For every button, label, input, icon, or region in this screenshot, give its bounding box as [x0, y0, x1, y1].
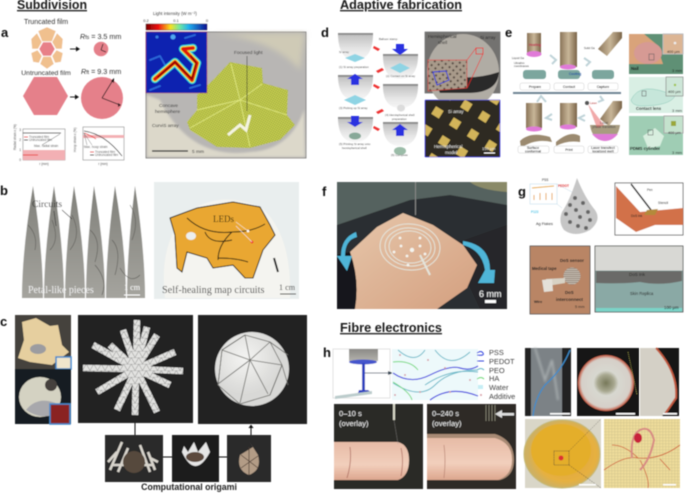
label: 3 mm: 3 mm	[672, 108, 683, 113]
panel letter f: f	[322, 184, 327, 199]
label: Computational origami: Computational origami	[141, 482, 237, 492]
chart: radial strain: Max. radial strain	[34, 144, 58, 148]
label: Self-healing map circuits: Self-healing map circuits	[162, 285, 264, 296]
schematic: hemisphere stamp steps: Si array	[339, 50, 350, 54]
label: 400 μm: 400 μm	[667, 50, 680, 54]
schematic: ink droplet with Ag flakes: P123	[531, 210, 539, 214]
schematic: ink droplet with Ag flakes: PEDOT	[558, 184, 569, 188]
divider	[513, 92, 621, 94]
label: Contact lens: Contact lens	[636, 106, 662, 111]
panel letter g: g	[518, 184, 526, 199]
schematic: hemisphere stamp steps: (6) Complete	[391, 153, 408, 157]
render: pen on arm with stencil: Stencil	[658, 201, 668, 205]
schematic: ink droplet with Ag flakes: Ag Flakes	[536, 222, 553, 226]
label: Focused light: Focused light	[234, 50, 263, 56]
SEM: DoS ink on skin replica: Skin Replica	[630, 291, 654, 296]
chart: radial strain: r (mm)	[39, 162, 49, 166]
schematic: printing process: Laser transfect	[591, 146, 616, 150]
chart: radial strain: Truncated film	[29, 135, 49, 139]
colour bar: light intensity: 0.1	[173, 18, 180, 23]
heatmap inset	[146, 32, 207, 93]
SEM: DoS ink on skin replica: 100 μm	[664, 305, 679, 310]
photo: fold stage 2	[172, 435, 219, 482]
schematic: printing process: Surface	[527, 146, 539, 150]
schematic: hemisphere stamp steps: (3) Picking up Si array	[339, 106, 368, 110]
chart: hoop strain: Untruncated film	[95, 153, 119, 157]
icon: large circle with radius arrows	[81, 77, 123, 119]
photo: dandelion zoom	[640, 348, 679, 416]
scale bar	[484, 152, 495, 154]
label: Si array: Si array	[480, 35, 496, 40]
photo: dandelion	[577, 348, 639, 416]
photo: DoS sensor on skin: Medical tape	[532, 266, 557, 271]
arrow: right curved blue	[463, 241, 495, 283]
photo: wrapped sphere	[15, 369, 71, 424]
chart: hoop strain	[73, 127, 124, 166]
photo: fold stage 3	[227, 435, 271, 482]
panel g: drop-on-skin sensor	[518, 178, 683, 314]
label: Rfs = 3.5 mm: Rfs = 3.5 mm	[80, 32, 121, 41]
label: model: model	[445, 150, 457, 155]
schematic: printing process: Laser	[590, 101, 597, 105]
scale bar 1 cm	[124, 294, 140, 296]
legend: fibre ink components: PEO	[489, 366, 505, 375]
chart: hoop strain: Truncated film	[95, 150, 115, 154]
panel d: adaptive fabrication steps	[321, 25, 500, 157]
chart: radial strain: 0	[19, 158, 21, 162]
schematic: ink droplet with Ag flakes: PSS	[542, 178, 548, 182]
label: Rft = 9.3 mm: Rft = 9.3 mm	[81, 67, 121, 76]
icon: LED markers	[236, 222, 253, 243]
schematic: hemisphere stamp steps: (4) Hemispherical shell	[385, 113, 415, 117]
label: Truncated film: Truncated film	[24, 19, 68, 26]
schematic: printing process: membranes	[514, 64, 529, 68]
scale bar 1 cm	[280, 293, 296, 295]
chart: hoop strain: Hoop strain ε (%)	[73, 128, 77, 152]
scale label: 1 cm	[279, 283, 296, 292]
label: (overlay): (overlay)	[339, 419, 369, 428]
legend: fibre ink components	[477, 348, 515, 401]
colour bar: light intensity: Light intensity (W m⁻²)	[153, 11, 197, 16]
icon: small circle with radius arrows	[94, 42, 108, 56]
colour bar: light intensity	[143, 11, 209, 30]
heading: Fibre electronics: Fibre electronics	[340, 320, 442, 335]
schematic: printing process: Solid Ga	[584, 46, 595, 50]
schematic: printing process: Liquid Ga	[512, 56, 524, 60]
photo: DoS sensor on skin	[530, 246, 590, 314]
panel letter e: e	[505, 25, 512, 40]
photo: petal-like pieces	[22, 186, 145, 298]
panel letter a: a	[1, 25, 9, 40]
icon: truncated film petals	[31, 27, 63, 69]
photo: DoS sensor on skin: DoS	[565, 290, 574, 295]
schematic: printing process: Contact	[563, 85, 576, 89]
colour bar: light intensity: 0.2	[143, 18, 150, 23]
schematic: printing process: Capture	[597, 85, 609, 89]
scale label: 6 mm: 6 mm	[479, 289, 502, 299]
schematic: printing process: Cooling	[569, 72, 581, 76]
diagram: polymer network	[392, 349, 478, 400]
SEM: DoS ink on skin replica: DoS Ink	[629, 272, 646, 277]
panel letter d: d	[321, 25, 329, 40]
legend: fibre ink components: PEDOT	[489, 357, 515, 366]
scale bar	[485, 300, 496, 303]
photo: hemispherical shell with Si array	[425, 32, 500, 110]
schematic: hemisphere stamp steps: (2) Contact on Si array	[386, 74, 416, 78]
photo: DoS sensor on skin: 5 mm	[575, 305, 584, 309]
label: Circuits: Circuits	[32, 200, 62, 210]
label: shell: shell	[438, 40, 447, 45]
schematic: printing process: Print	[565, 148, 574, 152]
photo: crumpled paper around sphere	[15, 315, 71, 369]
panel letter h: h	[323, 345, 331, 360]
colour bar: light intensity: 0	[206, 18, 209, 23]
panel a: subdivision schematic and focused light photo	[1, 11, 306, 166]
arrow: left curved blue	[337, 232, 357, 271]
photo: nail	[629, 34, 683, 74]
label: Hemispherical shell: Hemispherical	[428, 34, 457, 39]
photo: microscope view of Si array	[425, 100, 500, 157]
schematic: printing process: Heating	[529, 43, 541, 47]
legend: fibre ink components: Additive	[489, 392, 515, 401]
schematic: ink droplet with Ag flakes	[530, 178, 598, 234]
schematic: nozzle drawing fibre	[333, 349, 393, 399]
scale label: 5 mm	[192, 149, 204, 155]
label: PDMS cylinder: PDMS cylinder	[630, 146, 660, 151]
arrow: focused light	[246, 56, 248, 111]
label: LEDs: LEDs	[213, 214, 234, 224]
label: 3 mm: 3 mm	[672, 68, 683, 73]
schematic: printing process: phase transition	[592, 125, 616, 129]
photo: petri dish	[524, 419, 601, 488]
arrows: circuits	[54, 210, 72, 226]
label: scale 150 μm: 150 μm	[482, 146, 496, 151]
legend: fibre ink components: PSS	[489, 348, 504, 357]
schematic: printing process: Ultrathin	[514, 61, 525, 65]
photo: magnified vessels	[604, 419, 680, 488]
schematic: hemisphere stamp steps: Balloon stamp	[379, 37, 398, 41]
SEM: DoS ink on skin replica	[595, 246, 683, 312]
chart: hoop strain: r (mm)	[98, 162, 108, 166]
photo: DoS sensor on skin: interconnect	[556, 297, 584, 302]
label: Nail: Nail	[631, 66, 639, 71]
label: 3 mm: 3 mm	[672, 150, 683, 155]
label: Concave: Concave	[159, 103, 178, 109]
panel c: computational origami	[0, 314, 307, 492]
chart: radial strain: 2	[19, 138, 21, 142]
render: pen on arm with stencil	[615, 183, 683, 235]
photo: hand	[337, 182, 507, 309]
schematic: hemisphere stamp steps: (1) Si array preparation	[339, 65, 369, 69]
chart: hoop strain: Max. hoop strain	[84, 145, 108, 149]
photo: DoS sensor on skin: Wire	[534, 300, 542, 304]
photo: DoS sensor on skin: DoS sensor	[560, 258, 584, 263]
SEM: fibre on surface	[525, 348, 571, 416]
photo: finger 0-240 s overlay	[427, 404, 516, 489]
arrow: up to sphere	[248, 424, 254, 435]
schematic: printing process: localized melt	[592, 150, 615, 154]
arrow: untruncated to curved	[70, 96, 76, 98]
photo: PDMS cylinder	[629, 116, 683, 155]
schematic: printing process	[512, 32, 622, 154]
scale bar 5 mm	[152, 150, 188, 152]
label: CurviS array: CurviS array	[152, 123, 179, 129]
chart: radial strain	[13, 124, 65, 166]
label: Si array: Si array	[448, 109, 464, 114]
icon: untruncated hexagon	[23, 77, 68, 115]
arrow: truncated to curved	[70, 48, 77, 50]
connector lines between origami stages	[135, 423, 227, 457]
photo: assembled polyhedral sphere	[198, 315, 307, 424]
label: (overlay): (overlay)	[432, 419, 462, 428]
render: pen on arm with stencil: DoS ink	[631, 214, 643, 218]
panel f: hand photo with printed sensor	[322, 182, 507, 309]
label: Petal-like pieces: Petal-like pieces	[28, 285, 94, 296]
panel b: petal pieces and self-healing map	[0, 182, 299, 299]
label: hemisphere: hemisphere	[155, 109, 180, 115]
scale label: 1 cm	[124, 283, 141, 292]
schematic: hemisphere stamp steps: hemispherical shell	[342, 146, 367, 150]
schematic: printing process: Prepare	[529, 85, 541, 89]
photo: contact lens	[629, 77, 683, 113]
chart: radial strain: Untruncated film	[29, 138, 53, 142]
label: 400 μm: 400 μm	[668, 90, 681, 94]
photo: fold stage 1	[105, 435, 163, 482]
photo: concave hemisphere with curviS array	[146, 32, 306, 158]
label: Hemispherical model: Hemispherical	[434, 144, 463, 149]
chart: radial strain: 3	[19, 128, 21, 132]
schematic: printing process: Local	[600, 121, 608, 125]
schematic: hemisphere stamp steps: preparation	[392, 117, 407, 121]
schematic: hemisphere stamp steps: (5) Printing Si array onto	[339, 142, 371, 146]
label: 400 μm: 400 μm	[668, 131, 681, 135]
panel e: laser printing workflow	[505, 25, 683, 155]
panel letter b: b	[0, 183, 8, 198]
legend: fibre ink components: HA	[489, 374, 499, 383]
arrow: white pointing left	[495, 410, 514, 418]
photo: self-healing map circuits	[154, 182, 299, 299]
panel h: fibre electronics	[323, 345, 680, 489]
render: pen on arm with stencil: Pen	[647, 188, 653, 192]
legend: fibre ink components: Water	[489, 383, 509, 392]
schematic: hemisphere stamp steps	[338, 33, 418, 157]
label: 0-10 s: 0–10 s	[339, 409, 362, 418]
chart: radial strain: Radial strain ε (%)	[13, 124, 17, 150]
schematic: printing process: conformal	[525, 150, 541, 154]
photo: flat origami star	[78, 315, 193, 423]
label: Untruncated film: Untruncated film	[21, 70, 71, 77]
label: 0-240 s: 0–240 s	[432, 409, 459, 418]
chart: radial strain: 1	[19, 148, 21, 152]
photo: finger 0-10 s overlay	[334, 404, 423, 489]
panel letter c: c	[0, 314, 7, 329]
